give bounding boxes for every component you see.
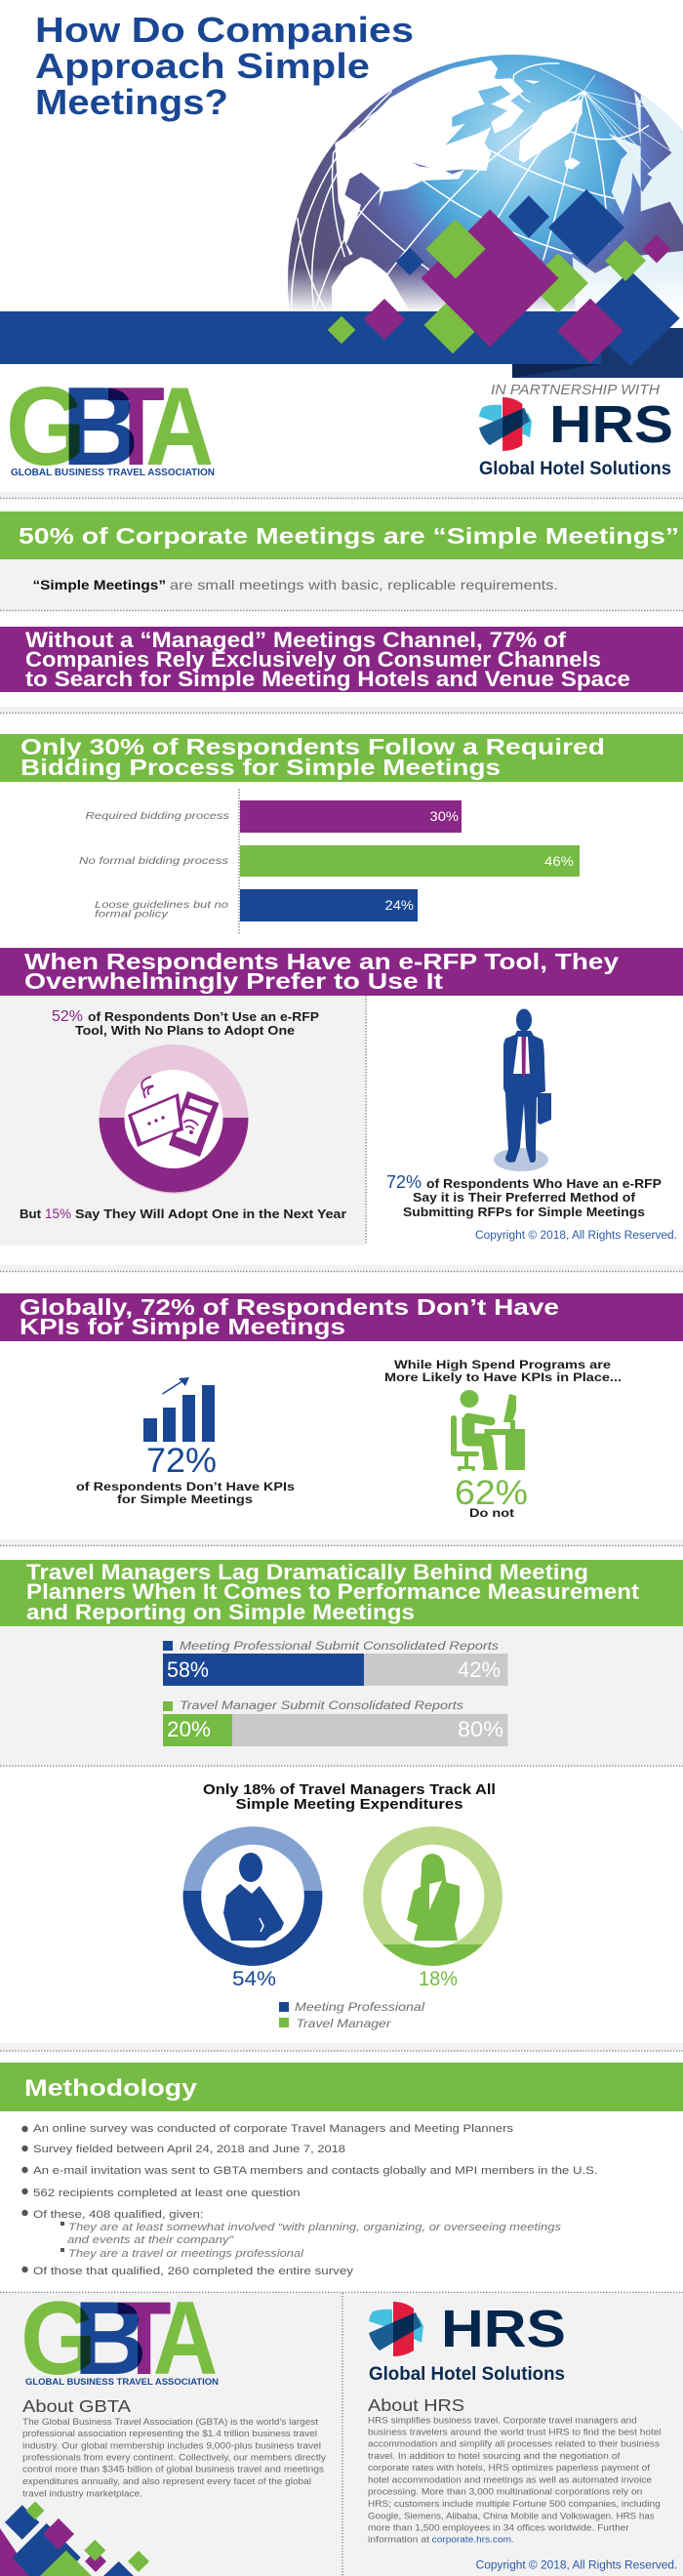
stat: 72 percent no KPIs: of Respondents Don’t Have KPIs (76, 1480, 295, 1493)
section: e-RFP heading: Overwhelmingly Prefer to Use It (24, 968, 443, 994)
HRS logo footer: HRS (441, 2300, 566, 2358)
methodology bullet list: Of those that qualified, 260 completed the entire survey (33, 2266, 354, 2277)
text: 15 percent: But (20, 1206, 42, 1221)
donut: travel manager 18 percent: 18% (419, 1968, 458, 1990)
footer diamonds (0, 2501, 149, 2576)
donut with devices icon (100, 1044, 248, 1194)
bar: required bidding process (86, 800, 462, 833)
bar: no formal bidding process: No formal bidding process (79, 855, 229, 867)
about HRS text: corporate.hrs.com (432, 2535, 511, 2545)
donut: travel manager 18 percent (363, 1826, 502, 1990)
definition text block: “Simple Meetings” (33, 577, 166, 593)
bar: meeting professional reports: 58% (167, 1657, 209, 1682)
text: 52 percent: 52% (52, 1008, 83, 1025)
panel: consolidated reports chart (0, 1626, 683, 1765)
text: 15 percent: Say They Will Adopt One in the Next Year (75, 1206, 346, 1221)
methodology bullet list: Of these, 408 qualified, given: (33, 2209, 203, 2221)
about HRS text: hotel accommodation and meetings as well as automated invoice (368, 2474, 652, 2484)
bar: meeting professional reports: Meeting Professional Submit Consolidated Reports (180, 1639, 499, 1653)
section: methodology heading (0, 2063, 683, 2111)
HRS logo with partnership line: HRS (549, 395, 673, 454)
panel: about HRS (342, 2293, 683, 2576)
donut: meeting professional 54 percent (183, 1826, 322, 1990)
section: e-RFP heading: When Respondents Have an e-RFP Tool, They (24, 949, 619, 974)
section: managed meetings heading (0, 627, 683, 692)
GBTA logo footer: G (20, 2279, 97, 2396)
about HRS text: . (511, 2535, 514, 2545)
stat: 62 percent do not (384, 1358, 622, 1520)
stat: 62 percent do not: 62% (455, 1474, 528, 1512)
methodology bullet list (21, 2123, 598, 2277)
section: 50 percent heading: 50% of Corporate Meetings are “Simple Meetings” (19, 523, 679, 549)
stat: 72 percent no KPIs: for Simple Meetings (117, 1492, 253, 1506)
GBTA logo footer: A (153, 2281, 218, 2397)
about GBTA text: professionals from every continent. Collectively, our members directly (22, 2453, 327, 2463)
section: e-RFP heading (0, 948, 683, 996)
section: KPIs heading (0, 1293, 683, 1341)
bar: travel manager reports: Travel Manager Submit Consolidated Reports (180, 1698, 463, 1712)
GBTA logo: B (61, 364, 140, 488)
GBTA logo footer: GLOBAL BUSINESS TRAVEL ASSOCIATION (25, 2377, 219, 2388)
about HRS text: business travelers around the world trust HRS to find the best hotel (368, 2427, 662, 2436)
GBTA logo: GLOBAL BUSINESS TRAVEL ASSOCIATION (11, 468, 215, 478)
text: 52 percent (52, 1008, 319, 1038)
GBTA logo (6, 364, 215, 489)
text: 72 percent preferred (386, 1171, 662, 1219)
HRS logo with partnership line: IN PARTNERSHIP WITH (491, 383, 661, 398)
about GBTA text: industry. Our global membership includes 9,000-plus business travel (22, 2440, 321, 2450)
bar: meeting professional reports (163, 1639, 507, 1686)
section: performance measurement heading (0, 1560, 683, 1626)
about HRS text: HRS; customers include multiple Fortune 500 companies, including (368, 2499, 661, 2509)
methodology bullet list: They are a travel or meetings professional (68, 2248, 304, 2260)
bar: no formal bidding process: 46% (544, 853, 574, 869)
GBTA logo: G (6, 364, 86, 489)
hero diamonds (328, 189, 680, 366)
expenditure tracking heading (203, 1781, 496, 1813)
legend: expenditure donuts: Travel Manager (297, 2017, 392, 2030)
about GBTA text: professional association representing the $1.4 trillion business travel (22, 2429, 317, 2438)
title: How Do Companies (35, 10, 414, 50)
stat: 62 percent do not: Do not (469, 1506, 514, 1520)
section: performance measurement heading: Planners When It Comes to Performance Measurement (26, 1579, 640, 1604)
methodology bullet list: Survey fielded between April 24, 2018 and June 7, 2018 (33, 2144, 345, 2155)
bar: meeting professional reports: 42% (458, 1657, 501, 1682)
bar: no formal bidding process (79, 845, 580, 877)
about HRS text: processing. More than 3,000 multinational corporations rely on (368, 2487, 642, 2497)
expenditure tracking heading: Only 18% of Travel Managers Track All (203, 1781, 496, 1798)
definition text block (0, 559, 683, 610)
about HRS text: travel. In addition to hotel sourcing and the negotiation of (368, 2451, 621, 2461)
HRS logo footer (369, 2300, 566, 2385)
about GBTA text (22, 2417, 327, 2498)
about HRS text: accommodation and simplify all processes related to their business (368, 2439, 661, 2449)
title: Approach Simple (35, 46, 370, 86)
about HRS text: HRS simplifies business travel. Corporate travel managers and (368, 2415, 637, 2425)
section: methodology heading: Methodology (24, 2075, 198, 2102)
text: 72 percent preferred: of Respondents Who Have an e-RFP (426, 1176, 662, 1191)
section: bidding process heading: Only 30% of Respondents Follow a Required (20, 734, 605, 759)
about HRS heading: About HRS (368, 2395, 464, 2415)
methodology bullet list: and events at their company” (67, 2234, 235, 2246)
about HRS text: more than 1,500 employees in 34 offices worldwide. Further (368, 2522, 629, 2532)
stat: 62 percent do not: More Likely to Have KPIs in Place... (384, 1370, 622, 1384)
about GBTA heading: About GBTA (22, 2396, 131, 2416)
GBTA logo footer (20, 2279, 219, 2397)
bar: travel manager reports: 20% (167, 1717, 211, 1741)
icon: businesswoman bust (407, 1854, 460, 1941)
GBTA logo: A (145, 365, 214, 489)
section: performance measurement heading: Travel Managers Lag Dramatically Behind Meeting (26, 1560, 588, 1584)
icon: businessman with briefcase (494, 1009, 551, 1171)
legend: expenditure donuts: Meeting Professional (295, 2000, 424, 2014)
text: 72 percent preferred: Submitting RFPs for Simple Meetings (403, 1205, 645, 1219)
donut: meeting professional 54 percent: 54% (232, 1968, 276, 1990)
expenditure tracking heading: Simple Meeting Expenditures (236, 1796, 462, 1813)
section: managed meetings heading: to Search for Simple Meeting Hotels and Venue Space (25, 667, 630, 691)
about GBTA text: control more than $345 billion of global business travel and meetings (22, 2465, 325, 2474)
methodology bullet list: 562 recipients completed at least one question (33, 2188, 301, 2199)
bar: loose guidelines: 24% (384, 897, 414, 913)
stat: 72 percent no KPIs: 72% (146, 1442, 217, 1480)
bar: travel manager reports: 80% (458, 1717, 503, 1741)
bar: loose guidelines: Loose guidelines but no (95, 899, 228, 911)
title: Meetings? (35, 82, 228, 122)
section: bidding process heading (0, 734, 683, 782)
HRS logo with partnership line (479, 383, 673, 479)
section: 50 percent heading (0, 511, 683, 559)
about GBTA text: The Global Business Travel Association (GBTA) is the world’s largest (22, 2417, 319, 2427)
methodology bullet list: They are at least somewhat involved “with planning, organizing, or overseeing meetings (68, 2222, 562, 2233)
bar: travel manager reports (163, 1698, 507, 1746)
copyright: Copyright © 2018, All Rights Reserved. (475, 1230, 677, 1242)
icon: rising bar chart (143, 1377, 215, 1442)
panel: about GBTA (0, 2279, 342, 2576)
stat: 62 percent do not: While High Spend Programs are (394, 1358, 611, 1371)
GBTA logo footer: T (117, 2280, 172, 2397)
section: bidding process heading: Bidding Process for Simple Meetings (20, 755, 501, 780)
about HRS text: information at (368, 2535, 430, 2545)
section: KPIs heading: KPIs for Simple Meetings (20, 1314, 345, 1339)
about GBTA text: travel industry marketplace. (22, 2488, 142, 2498)
methodology bullet list: An e-mail invitation was sent to GBTA members and contacts globally and MPI members in the U.S. (33, 2165, 597, 2177)
section: KPIs heading: Globally, 72% of Respondents Don’t Have (20, 1294, 559, 1320)
about GBTA text: expenditures annually, and also represent every facet of the global (22, 2476, 311, 2486)
hero globe (283, 49, 683, 312)
bar: loose guidelines (95, 889, 418, 921)
GBTA logo footer: B (74, 2281, 147, 2396)
section: managed meetings heading: Companies Rely Exclusively on Consumer Channels (25, 647, 601, 672)
panel: e-RFP adoption (0, 996, 365, 1246)
text: 52 percent: of Respondents Don’t Use an e-RFP (88, 1009, 319, 1024)
copyright footer: Copyright © 2018, All Rights Reserved. (476, 2560, 677, 2572)
section: managed meetings heading: Without a “Managed” Meetings Channel, 77% of (25, 628, 567, 652)
HRS logo with partnership line: Global Hotel Solutions (479, 459, 671, 479)
section: performance measurement heading: and Reporting on Simple Meetings (26, 1600, 415, 1624)
about HRS text: corporate rates with hotels, HRS optimizes paperless payment of (368, 2463, 651, 2473)
text: 15 percent: 15% (45, 1206, 71, 1221)
stat: 72 percent no KPIs (76, 1377, 295, 1506)
title (35, 10, 414, 122)
panel: preferred e-RFP method (386, 1009, 677, 1242)
icon: businessman bust (223, 1853, 284, 1941)
definition text block: are small meetings with basic, replicable requirements. (170, 577, 558, 593)
bar: loose guidelines: formal policy (95, 908, 169, 920)
hero ribbon band (0, 311, 683, 378)
bar: required bidding process: Required bidding process (86, 810, 230, 822)
about HRS text: Google, Siemens, Alibaba, China Mobile and Volkswagen. HRS has (368, 2511, 655, 2520)
text: 72 percent preferred: 72% (386, 1171, 422, 1192)
bar: required bidding process: 30% (429, 808, 459, 824)
methodology bullet list: An online survey was conducted of corporate Travel Managers and Meeting Planners (33, 2123, 514, 2135)
icon: person at desk (451, 1390, 525, 1471)
text: 52 percent: Tool, With No Plans to Adopt One (75, 1023, 295, 1038)
HRS logo footer: Global Hotel Solutions (369, 2364, 565, 2385)
GBTA logo: T (107, 364, 165, 489)
legend: expenditure donuts (279, 2000, 424, 2030)
about HRS text (368, 2415, 662, 2545)
bar chart: bidding process (79, 789, 580, 935)
text: 72 percent preferred: Say it is Their Preferred Method of (413, 1190, 636, 1205)
